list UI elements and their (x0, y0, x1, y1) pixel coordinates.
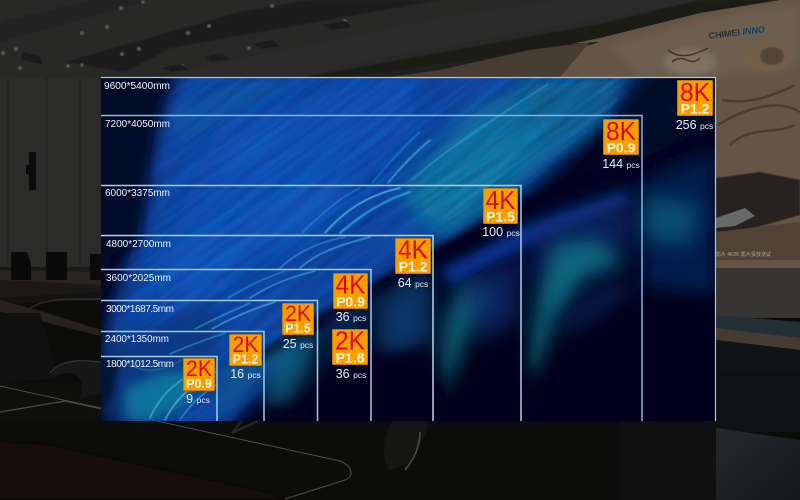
badge: 2K P1.2: 16 pcs (230, 367, 261, 381)
badge: 2K P1.8: P1.8 (336, 350, 365, 366)
display caption text: 影片 4K2K 影片投放测试 (716, 251, 771, 258)
badge: 2K P1.5: 2K (285, 301, 311, 326)
badge: 8K P0.9: P0.9 (607, 140, 636, 156)
label: 4800: 4800*2700mm (106, 239, 171, 250)
badge: 8K P0.9: 8K (606, 116, 637, 146)
badge: 8K P1.2 (676, 77, 713, 132)
badge: 2K P1.8: 2K (335, 326, 366, 356)
badge: 2K P1.2: 2K (232, 332, 259, 357)
badge: 2K P0.9: 9 pcs (186, 392, 210, 406)
badge: 4K P1.2: 64 pcs (398, 276, 428, 290)
streak texture (104, 78, 639, 421)
badge: 4K P1.5: P1.5 (486, 208, 515, 224)
label: 9600: 9600*5400mm (104, 81, 170, 92)
badge: 4K P1.5: 4K (486, 185, 516, 215)
size labels (104, 81, 174, 370)
outline: 7200x4050 (101, 116, 642, 421)
badge: 2K P0.9: P0.9 (186, 377, 212, 391)
left tables and chairs (0, 267, 101, 299)
display wall artwork (380, 0, 800, 268)
badge: 2K P1.2 (230, 332, 262, 381)
badge: 8K P0.9: 144 pcs (602, 157, 640, 171)
streaks (130, 84, 548, 420)
badge: 8K P1.2: 256 pcs (676, 118, 713, 132)
badge: 8K P0.9 (602, 116, 640, 171)
swirl lower left (101, 300, 215, 421)
badge: 4K P1.2: P1.2 (399, 258, 428, 274)
nested size outlines (101, 78, 716, 421)
dark left fade (101, 78, 178, 317)
badge: 4K P0.9: 4K (336, 270, 366, 300)
left wall (0, 78, 101, 270)
badge: 4K P1.2 (396, 234, 430, 290)
ceiling (0, 0, 800, 78)
badge: 2K P1.2: P1.2 (233, 352, 258, 366)
badge: 2K P1.5 (282, 301, 314, 351)
badge: 4K P0.9: 36 pcs (336, 310, 366, 324)
badge: 8K P1.2: 8K (680, 77, 711, 107)
label: 7200: 7200*4050mm (105, 119, 170, 130)
badge: 4K P0.9 (334, 270, 368, 324)
outline: 2400x1350 (101, 332, 264, 421)
badge: 2K P1.8 (332, 326, 368, 381)
outline: 3600x2025 (101, 270, 371, 421)
outline: 3000x1687.5 (101, 300, 318, 421)
badge: 2K P0.9 (184, 356, 214, 406)
teal arcs (526, 240, 625, 380)
label: 1800: 1800*1012.5mm (106, 359, 174, 370)
outline: 4800x2700 (101, 236, 433, 421)
badge: 8K P1.2: P1.2 (681, 100, 710, 116)
black bottom fade (372, 330, 532, 395)
foreground table (0, 443, 288, 498)
badge: 4K P0.9: P0.9 (336, 294, 365, 310)
blue diagonal swath (101, 78, 656, 421)
badge: 4K P1.5 (482, 185, 520, 239)
outline: 9600x5400 (101, 78, 716, 421)
panel: nested LED wall artwork (101, 78, 715, 421)
badge: 4K P1.2: 4K (398, 234, 429, 264)
outline: 6000x3375 (101, 186, 521, 421)
label: 3000: 3000*1687.5mm (106, 304, 174, 315)
light under the band (440, 190, 630, 285)
badge: 2K P0.9: 2K (186, 356, 212, 381)
display logo text: CHIMEI INNO (708, 24, 765, 41)
dark diagonal shadow band (262, 192, 546, 364)
wall and table on right (716, 268, 800, 318)
outline: 1800x1012.5 (101, 356, 217, 421)
label: 2400: 2400*1350mm (105, 334, 169, 345)
badge: 4K P1.5: 100 pcs (482, 225, 520, 239)
label: 3600: 3600*2025mm (106, 273, 171, 284)
chair arm (232, 421, 258, 433)
badge: 2K P1.5: 25 pcs (283, 337, 313, 351)
badge: 2K P1.8: 36 pcs (336, 367, 366, 381)
badge: 2K P1.5: P1.5 (285, 322, 311, 336)
label: 6000: 6000*3375mm (105, 188, 170, 199)
